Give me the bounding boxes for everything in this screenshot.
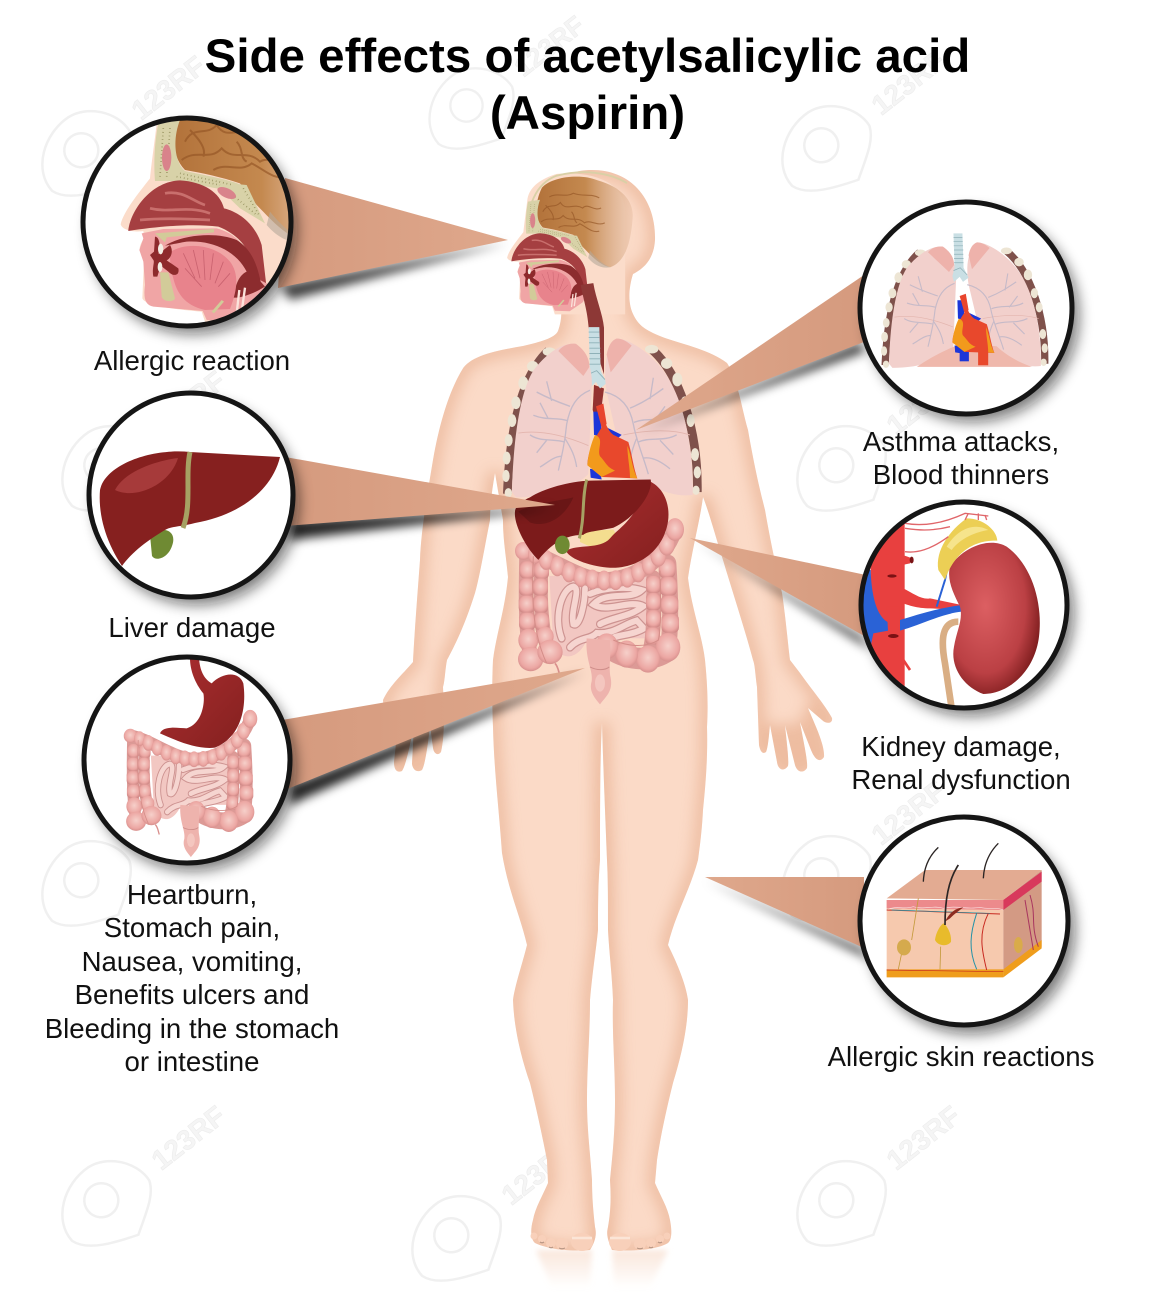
human body [383,170,832,1251]
callout: lungs [636,275,864,430]
label: asthma attacks: Blood thinners [873,459,1049,490]
panel: kidney circle [861,502,1067,708]
foot reflections [536,1250,668,1288]
callout: liver damage [285,457,555,526]
label: digestive effects [45,879,339,1077]
panel: allergic reaction circle [80,116,294,328]
panel: digestive circle [84,657,290,863]
title [205,30,970,140]
callout: skin [705,877,864,948]
head and airway anatomy [507,172,633,314]
label: digestive effects: or intestine [125,1046,259,1077]
panel: liver circle [89,393,293,597]
lungs and ribs [502,338,701,497]
circle shadows [89,126,1079,1034]
callout: kidney [690,538,866,637]
intestines [515,518,684,704]
label: kidney damage: Renal dysfunction [851,764,1071,795]
panel: skin circle [860,817,1068,1025]
label: digestive effects: Heartburn, [127,879,257,910]
label: allergic reaction: Allergic reaction [94,345,290,376]
trachea and esophagus [581,283,607,421]
label: allergic skin reactions: Allergic skin reactions [828,1041,1094,1072]
label: digestive effects: Nausea, vomiting, [82,946,302,977]
label: kidney damage [851,731,1071,795]
callout shadows [280,243,870,960]
title: Side effects of acetylsalicylic acid [205,30,970,83]
heart [587,403,637,480]
label: digestive effects: Bleeding in the stomach [45,1013,339,1044]
callout: allergic reaction [278,178,508,288]
label: digestive effects: Benefits ulcers and [75,979,309,1010]
labels: left column [45,345,339,1077]
label: liver damage: Liver damage [108,612,276,643]
toes [530,1232,670,1251]
label: asthma attacks: Asthma attacks, [863,426,1059,457]
label: digestive effects: Stomach pain, [104,912,280,943]
label: kidney damage: Kidney damage, [861,731,1061,762]
callout: digestive tract [282,668,585,790]
panel: lungs circle [860,202,1072,414]
labels: right column [828,426,1094,1072]
title: (Aspirin) [490,87,685,140]
label: asthma attacks [863,426,1059,490]
liver and stomach [515,480,668,568]
